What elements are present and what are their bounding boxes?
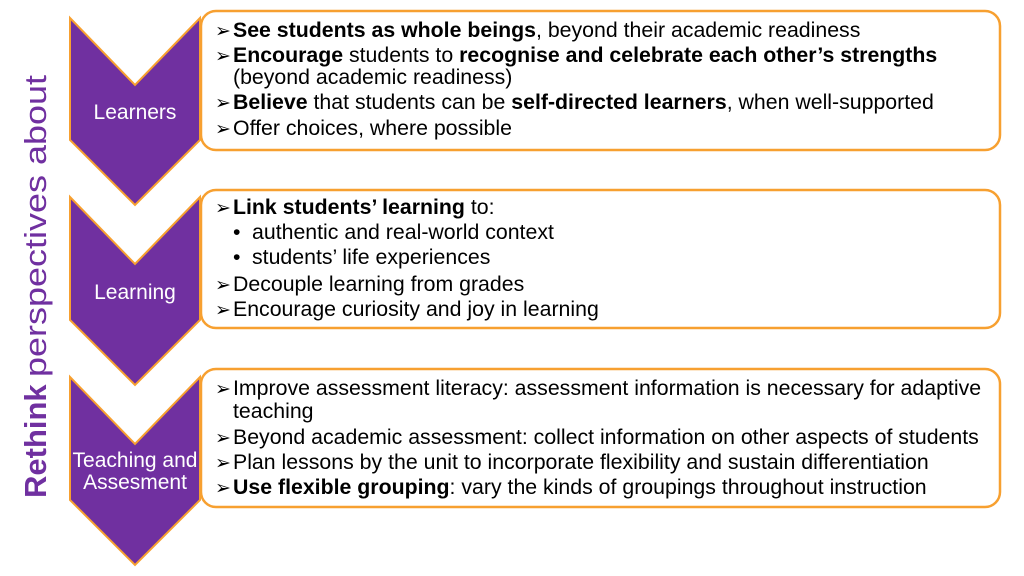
chevron: Teaching and Assesment: Assesment xyxy=(83,471,187,494)
panel: learners: Believe that students can be self-directed learners, when well-supported xyxy=(233,90,934,114)
panel: learning xyxy=(201,190,1000,328)
panel: learning: Link students’ learning to: xyxy=(233,195,495,219)
panel: teaching and assessment: Use flexible grouping: vary the kinds of groupings throughout instruction xyxy=(233,475,927,499)
panel: learning: Decouple learning from grades xyxy=(233,272,524,296)
panel: learners: See students as whole beings, beyond their academic readiness xyxy=(233,18,860,42)
panel: teaching and assessment: ➢ xyxy=(215,453,231,474)
panel: learners xyxy=(201,11,1000,150)
panel: learning: ➢ xyxy=(215,300,231,321)
panel: teaching and assessment: ➢ xyxy=(215,428,231,449)
panel: learning: Encourage curiosity and joy in learning xyxy=(233,297,599,321)
panel: learning: ➢ xyxy=(215,198,231,219)
panel: learners: (beyond academic readiness) xyxy=(233,65,512,89)
panel: learners: ➢ xyxy=(215,93,231,114)
panel: learning: • xyxy=(233,220,240,244)
panel: learning: authentic and real-world context xyxy=(252,220,554,244)
chevron: Learning: Learning xyxy=(94,281,176,304)
panel: teaching and assessment: ➢ xyxy=(215,379,231,400)
panel: teaching and assessment: Plan lessons by the unit to incorporate flexibility and sustain differentiation xyxy=(233,450,929,474)
panel: learners: Encourage students to recognise and celebrate each other’s strengths xyxy=(233,43,937,67)
vertical title: perspectives about xyxy=(18,75,53,377)
chevron: Teaching and Assesment xyxy=(70,377,200,565)
panel: teaching and assessment: Improve assessment literacy: assessment information is necessary for adaptive xyxy=(233,376,981,400)
panel: teaching and assessment: ➢ xyxy=(215,478,231,499)
panel: learners: ➢ xyxy=(215,21,231,42)
panel: teaching and assessment xyxy=(201,369,1000,507)
panel: learners: ➢ xyxy=(215,46,231,67)
panel: learning: students’ life experiences xyxy=(252,245,490,269)
chevron: Learners: Learners xyxy=(94,101,176,124)
chevron: Learning xyxy=(70,197,200,385)
panel: teaching and assessment: Beyond academic assessment: collect information on other aspects of students xyxy=(233,425,979,449)
chevron: Teaching and Assesment: Teaching and xyxy=(73,449,197,472)
panel: learners: ➢ xyxy=(215,119,231,140)
panel: teaching and assessment: teaching xyxy=(233,399,314,423)
vertical title xyxy=(18,75,53,498)
panel: learning: ➢ xyxy=(215,275,231,296)
panel: learners: Offer choices, where possible xyxy=(233,116,512,140)
vertical title: Rethink xyxy=(18,384,53,498)
chevron: Learners xyxy=(70,18,200,205)
panel: learning: • xyxy=(233,245,240,269)
